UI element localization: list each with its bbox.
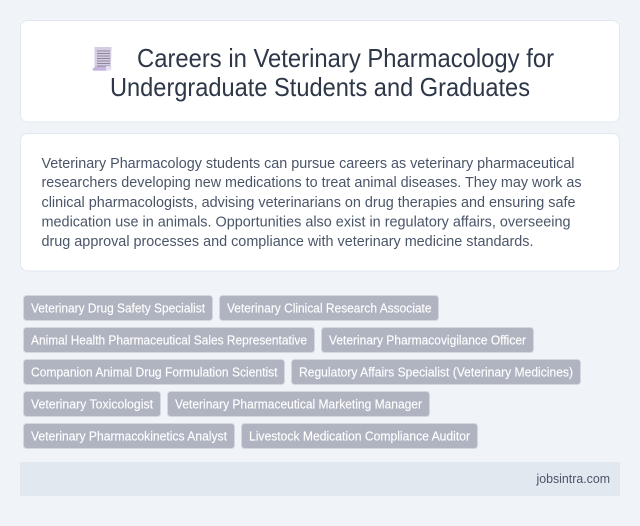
tag — [322, 328, 534, 352]
tag: Veterinary Toxicologist — [31, 396, 153, 412]
text block: description: drug approval processes and compliance with veterinary medicine standards. — [42, 233, 534, 250]
tag — [292, 360, 580, 384]
footer: jobsintra.com — [536, 471, 610, 486]
tag: Livestock Medication Compliance Auditor — [249, 428, 471, 444]
footer — [20, 462, 620, 496]
text block: description: medication use in animals. Opportunities also exist in regulatory affairs, overseeing — [42, 214, 570, 230]
tag — [24, 328, 314, 352]
tag — [220, 296, 438, 320]
tag: Animal Health Pharmaceutical Sales Representative — [31, 332, 307, 348]
panel: header — [20, 20, 620, 122]
tag — [24, 392, 160, 416]
tag: Veterinary Pharmaceutical Marketing Manager — [175, 396, 423, 412]
tag — [24, 296, 212, 320]
text block: description: researchers developing new medications to treat animal diseases. They may work as — [42, 174, 582, 191]
panel: description — [20, 134, 620, 271]
tag — [168, 392, 430, 416]
tag — [242, 424, 478, 448]
tag: Veterinary Drug Safety Specialist — [31, 300, 205, 316]
title: Careers in Veterinary Pharmacology for — [137, 43, 554, 73]
tag: Companion Animal Drug Formulation Scientist — [31, 364, 278, 380]
title: Undergraduate Students and Graduates — [110, 72, 530, 102]
tag: Veterinary Clinical Research Associate — [227, 300, 432, 316]
title — [110, 43, 554, 102]
text block: description — [42, 155, 582, 250]
text block: description: Veterinary Pharmacology students can pursue careers as veterinary pharmaceutical — [42, 155, 574, 172]
icon: document scroll — [92, 47, 112, 71]
tag: Regulatory Affairs Specialist (Veterinary Medicines) — [299, 364, 573, 380]
tag — [24, 360, 284, 384]
tags: career list — [24, 296, 580, 448]
tag — [24, 424, 234, 448]
text block: description: clinical pharmacologists, advising veterinarians on drug therapies and ensuring safe — [42, 194, 576, 211]
tag: Veterinary Pharmacokinetics Analyst — [31, 428, 227, 444]
tag: Veterinary Pharmacovigilance Officer — [329, 332, 527, 348]
